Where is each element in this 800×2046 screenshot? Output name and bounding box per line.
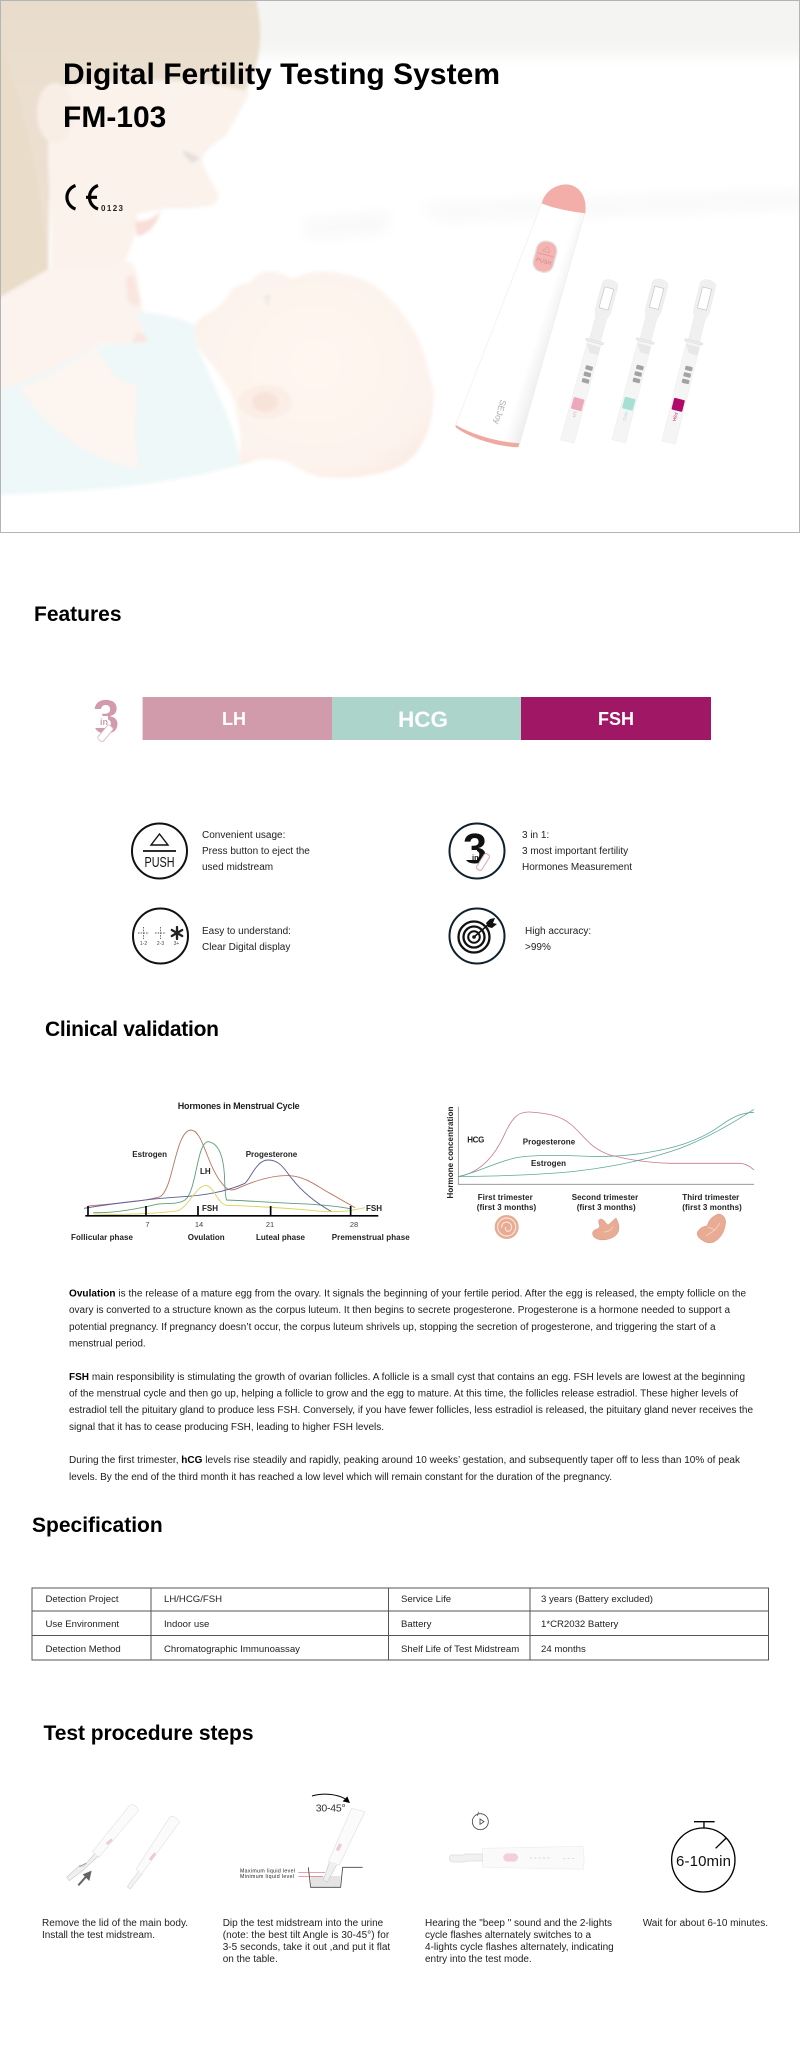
text block: Clear Digital display [202, 942, 290, 953]
icon: digital display: 1-2 [140, 941, 147, 947]
midstream LH [558, 278, 620, 444]
feature: easy to understand [133, 908, 291, 964]
step 1 text: Install the test midstream. [42, 1930, 155, 1941]
step 2 illustration: dip midstream: Minimum liquid level [240, 1874, 294, 1880]
midstream HCG: HCG [622, 411, 629, 422]
text block: ovulation, FSH and hCG explanation: estradiol tell the pituitary gland to produce less FSH. Conversely, if you have fewer follicles, less estradiol is released, the pituitary gland never receives the [69, 1405, 753, 1416]
icon: 3 in 1 pink: 3 [93, 690, 119, 743]
step 3 text: Hearing the "beep " sound and the 2-lights [425, 1918, 612, 1929]
specification table: Indoor use [164, 1619, 209, 1630]
CE mark 0123 [67, 186, 124, 213]
step 4 illustration: timer 6-10min: 6-10min [676, 1853, 731, 1870]
chart: hormone concentration in pregnancy: First trimester [478, 1193, 533, 1202]
segment: FSH [521, 697, 711, 740]
text block: ovulation, FSH and hCG explanation: potential pregnancy. If pregnancy doesn’t occur, the corpus luteum shrivels up, stopping the secretion of progesterone, and triggering the start of a [69, 1322, 716, 1333]
specification table [32, 1588, 768, 1660]
chart: hormones in menstrual cycle: Hormones in Menstrual Cycle [178, 1101, 300, 1111]
segment: LH [143, 697, 332, 740]
chart: hormones in menstrual cycle: Progesterone [246, 1150, 298, 1159]
text block: Convenient usage: [202, 830, 285, 841]
text block [202, 926, 291, 953]
hero panel: mother and baby photo with product [0, 0, 800, 532]
chart: hormones in menstrual cycle [71, 1101, 410, 1242]
midstream LH: LH [572, 411, 578, 418]
specification table: Service Life [401, 1594, 451, 1605]
step 2 text: (note: the best tilt Angle is 30-45°) for [223, 1930, 390, 1941]
midstream FSH: FSH [672, 412, 679, 422]
specification table: Detection Project [46, 1594, 119, 1605]
icon: 3 in 1: in [472, 853, 479, 862]
product: main reader and three midstreams [456, 184, 718, 447]
text block: used midstream [202, 862, 273, 873]
chart: hormone concentration in pregnancy: Estrogen [531, 1159, 566, 1168]
text block: ovulation, FSH and hCG explanation: FSH main responsibility is stimulating the growth of ovarian follicles. A follicle is a small cyst that contains an egg. FSH levels are lowest at the beginning [69, 1372, 745, 1383]
text block: ovulation, FSH and hCG explanation: of the menstrual cycle and then go up, helping a follicle to grow and the egg to mature. At this time, the follicles release estradiol. These higher levels of [69, 1388, 738, 1400]
text block: ovulation, FSH and hCG explanation: signal that it has to cease producing FSH, leading to higher FSH levels. [69, 1422, 384, 1433]
specification table: LH/HCG/FSH [164, 1594, 222, 1605]
specification table: 24 months [541, 1644, 586, 1655]
step 3 text: entry into the test mode. [425, 1954, 532, 1965]
chart: hormone concentration in pregnancy: (first 3 months) [682, 1203, 742, 1212]
step 2 illustration: dip midstream [240, 1794, 365, 1887]
icon: embryo second trimester [593, 1218, 619, 1240]
step 2 illustration: dip midstream: 30-45° [316, 1802, 346, 1814]
chart: hormones in menstrual cycle: Follicular phase [71, 1233, 134, 1242]
segment: FSH: FSH [598, 709, 634, 729]
segment: LH: LH [222, 709, 246, 729]
text block: Easy to understand: [202, 926, 291, 937]
text block: ovulation, FSH and hCG explanation: levels. By the end of the third month it has reached a low level which will remain constant for the duration of the pregnancy. [69, 1472, 612, 1483]
step 3 text: cycle flashes alternately switches to a [425, 1930, 591, 1941]
chart: hormones in menstrual cycle: Luteal phase [256, 1233, 306, 1242]
step 3 text: 4-lights cycle flashes alternately, indicating [425, 1942, 614, 1953]
step 4 illustration: timer 6-10min [672, 1822, 735, 1892]
feature: 3 in 1 [450, 824, 632, 878]
chart: hormones in menstrual cycle: FSH [366, 1204, 382, 1213]
chart: hormones in menstrual cycle: Estrogen [132, 1150, 167, 1159]
chart: hormones in menstrual cycle: LH [200, 1167, 211, 1176]
midstream HCG [610, 277, 670, 444]
text block: 3 in 1: [522, 830, 549, 841]
heading: Clinical validation: Clinical validation [45, 1018, 219, 1041]
chart: hormone concentration in pregnancy: Progesterone [523, 1138, 576, 1146]
step 2 text: 3-5 seconds, take it out ,and put it flat [223, 1942, 390, 1953]
step 2 text: Dip the test midstream into the urine [223, 1918, 384, 1929]
chart: hormone concentration in pregnancy: (first 3 months) [477, 1203, 537, 1212]
specification table: Shelf Life of Test Midstream [401, 1644, 519, 1655]
text block: >99% [525, 942, 551, 953]
step 3 illustration: beep and device [449, 1812, 584, 1869]
text block: ovulation, FSH and hCG explanation: ovary is converted to a structure known as the corpus luteum. It then begins to secrete progesterone. Progesterone is a hormone needed to support a [69, 1305, 730, 1316]
text block: ovulation, FSH and hCG explanation: menstrual period. [69, 1338, 146, 1350]
chart: hormone concentration in pregnancy: (first 3 months) [577, 1203, 636, 1212]
feature: convenient usage [132, 824, 310, 878]
text block [522, 830, 632, 873]
icon: target [450, 908, 504, 964]
specification table: Detection Method [46, 1644, 121, 1655]
icon: digital display: 3+ [174, 941, 179, 947]
chart: hormone concentration in pregnancy: Hormone concentration [446, 1106, 455, 1198]
text block: Press button to eject the [202, 846, 310, 857]
specification table: 3 years (Battery excluded) [541, 1594, 653, 1605]
CE mark 0123: 0123 [101, 204, 124, 213]
title [63, 58, 500, 134]
text block [525, 926, 591, 953]
text block: Hormones Measurement [522, 862, 632, 873]
feature: high accuracy [450, 908, 591, 964]
icon: digital display: 2-3 [157, 941, 164, 947]
heading: Test procedure steps: Test procedure steps [44, 1722, 254, 1745]
icon: 3 in 1 [450, 824, 504, 878]
hormone colour bar [143, 697, 711, 740]
photo: mother and baby [0, 0, 800, 495]
chart: hormone concentration in pregnancy: Third trimester [682, 1193, 739, 1202]
step 1 illustration: install midstream [67, 1805, 179, 1889]
chart: hormone concentration in pregnancy: Second trimester [572, 1193, 638, 1202]
chart: hormones in menstrual cycle: FSH [202, 1204, 218, 1213]
icon: 3 in 1 pink: in [100, 717, 108, 727]
specification table: Use Environment [46, 1619, 119, 1630]
icon: fetus third trimester [697, 1214, 726, 1243]
step 3 text [425, 1918, 614, 1965]
icon: push button: PUSH [145, 853, 174, 870]
step 1 text: Remove the lid of the main body. [42, 1918, 188, 1929]
chart: hormones in menstrual cycle: Premenstrual phase [332, 1233, 410, 1242]
text block [202, 830, 310, 873]
text block: ovulation, FSH and hCG explanation: Ovulation is the release of a mature egg from the ovary. It signals the beginning of your fertile period. After the egg is released, the empty follicle on the [69, 1288, 746, 1300]
chart: hormone concentration in pregnancy: HCG [467, 1136, 484, 1144]
specification table: 1*CR2032 Battery [541, 1619, 619, 1630]
text block: ovulation, FSH and hCG explanation: During the first trimester, hCG levels rise steadily and rapidly, peaking around 10 weeks’ gestation, and subsequently taper off to less than 10% of peak [69, 1455, 741, 1466]
step 2 text [223, 1918, 390, 1965]
title: Digital Fertility Testing System [63, 58, 500, 91]
product: main reader and three midstreams: PUSH [535, 257, 552, 267]
title: FM-103 [63, 101, 166, 134]
heading: Specification: Specification [32, 1514, 163, 1537]
chart: hormones in menstrual cycle: 7 [145, 1220, 150, 1229]
chart: hormones in menstrual cycle: 21 [266, 1220, 274, 1229]
step 4 text: Wait for about 6-10 minutes. [643, 1918, 768, 1929]
segment: HCG [332, 697, 521, 740]
heading: Features: Features [34, 603, 122, 626]
product: main reader and three midstreams: SEJoy [492, 399, 508, 426]
segment: HCG: HCG [398, 707, 448, 732]
icon: embryo first trimester [495, 1215, 519, 1239]
step 2 text: on the table. [223, 1954, 278, 1965]
icon: push button [132, 824, 187, 878]
text block: ovulation, FSH and hCG explanation [69, 1288, 753, 1483]
chart: hormones in menstrual cycle: 28 [350, 1220, 358, 1229]
chart: hormone concentration in pregnancy [446, 1106, 754, 1243]
chart: hormones in menstrual cycle: 14 [195, 1220, 203, 1229]
text block: High accuracy: [525, 926, 591, 937]
step 1 text [42, 1918, 188, 1941]
midstream FSH [660, 278, 718, 445]
step 2 illustration: dip midstream: Maximum liquid level [240, 1868, 295, 1874]
chart: hormones in menstrual cycle: Ovulation [188, 1233, 225, 1242]
icon: digital display [133, 908, 188, 964]
icon: 3 in 1: 3 [463, 825, 487, 873]
specification table: Battery [401, 1619, 432, 1630]
text block: 3 most important fertility [522, 846, 628, 857]
specification table: Chromatographic Immunoassay [164, 1644, 300, 1655]
